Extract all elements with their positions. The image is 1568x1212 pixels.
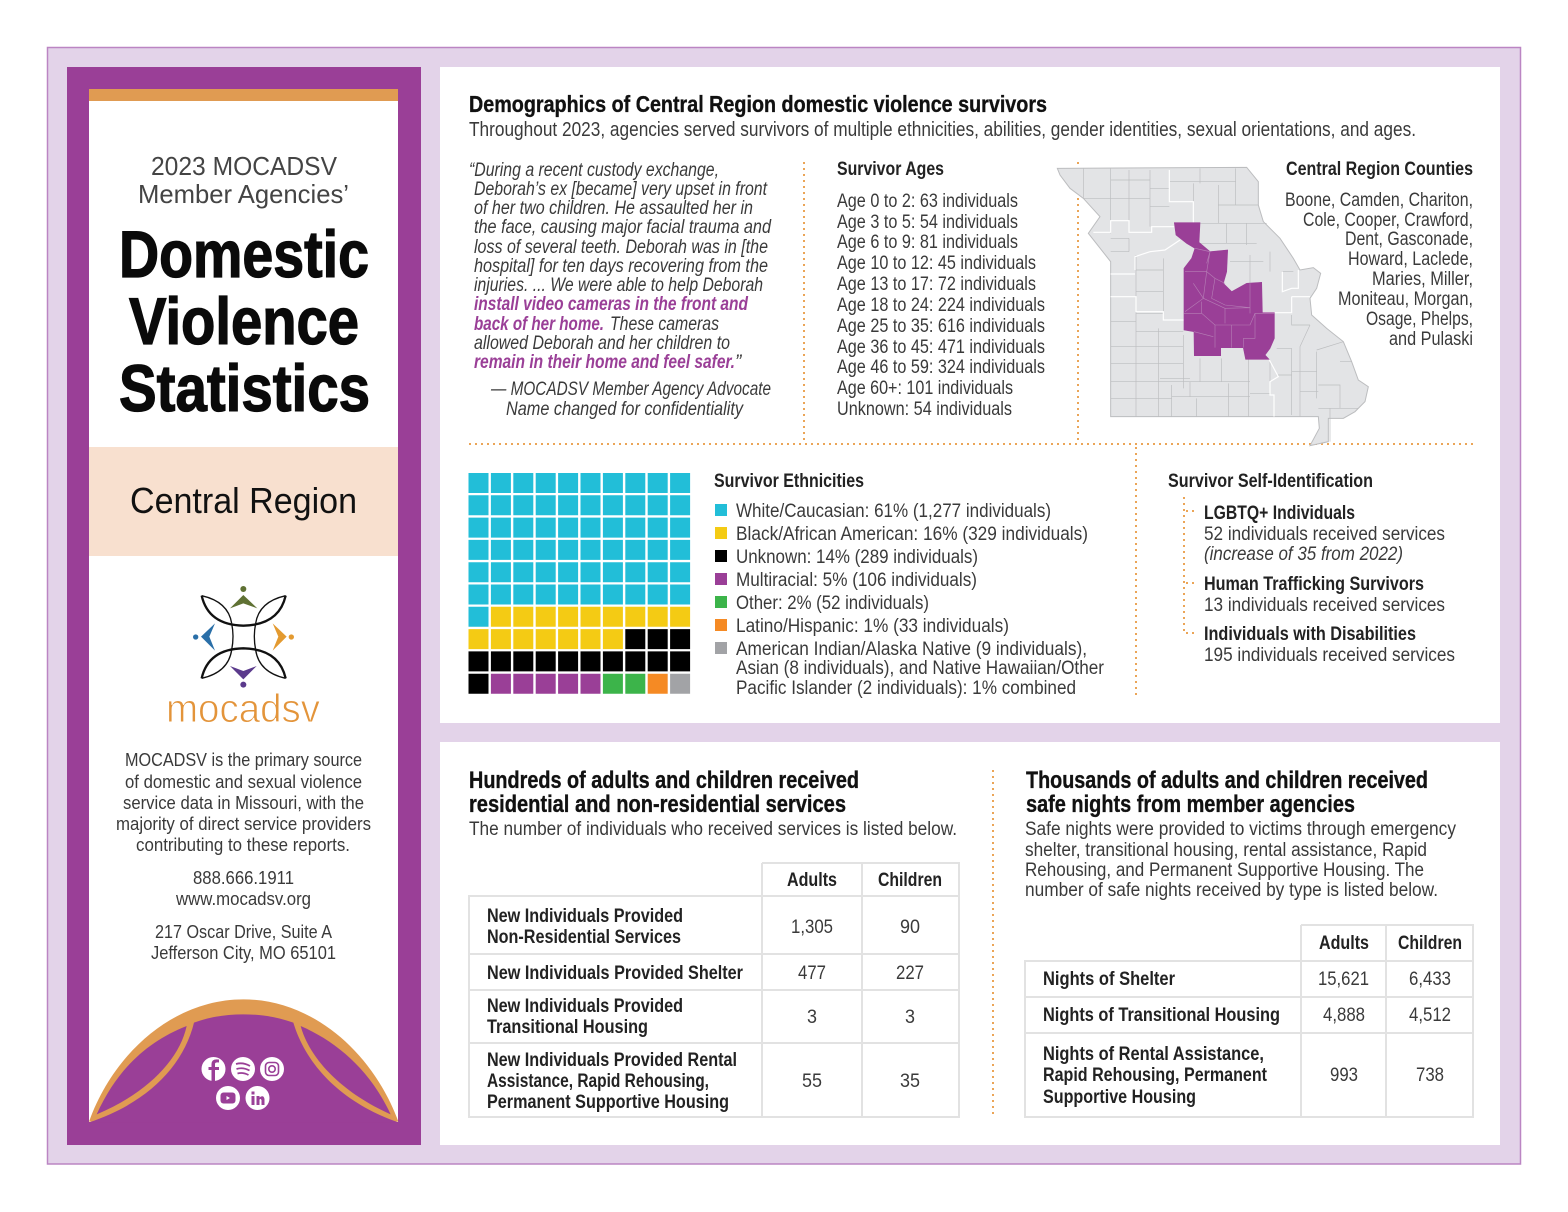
- ethnicity legend: Pacific Islander (2 individuals): 1% combined: [736, 678, 1076, 699]
- survivor self-identification: Survivor Self-Identification: [1168, 471, 1373, 492]
- survivor ages list: Age 25 to 35: 616 individuals: [837, 316, 1045, 337]
- quote from advocate: Name changed for confidentiality: [506, 399, 744, 420]
- heading: demographics: [469, 91, 1416, 141]
- county list: Dent, Gasconade,: [1345, 229, 1473, 250]
- quote from advocate: ”: [735, 352, 743, 373]
- heading: safe nights: number of safe nights received by type is listed below.: [1025, 880, 1438, 901]
- icons: social media: [202, 1057, 284, 1110]
- county list: and Pulaski: [1389, 329, 1473, 350]
- contact details: 217 Oscar Drive, Suite A: [155, 921, 333, 942]
- heading: demographics: Throughout 2023, agencies served survivors of multiple ethnicities, abilities, gender identities, sexual orientations, and ages.: [469, 119, 1416, 141]
- about text: [116, 749, 371, 855]
- map: Missouri counties: [1057, 167, 1368, 446]
- survivor ages list: Age 36 to 45: 471 individuals: [837, 337, 1045, 358]
- ethnicity legend: Black/African American: 16% (329 individuals): [736, 524, 1088, 545]
- table: services: New Individuals Provided: [487, 906, 683, 927]
- heading: safe nights: Thousands of adults and children received: [1026, 767, 1428, 794]
- quote from advocate: loss of several teeth. Deborah was in [the: [474, 237, 768, 258]
- quote from advocate: the face, causing major facial trauma and: [474, 217, 772, 238]
- quote from advocate: back of her home.: [474, 314, 604, 335]
- contact details: www.mocadsv.org: [175, 888, 311, 909]
- heading: demographics: Demographics of Central Region domestic violence survivors: [469, 91, 1047, 117]
- survivor self-identification: (increase of 35 from 2022): [1204, 544, 1403, 565]
- main title: Statistics: [119, 351, 370, 425]
- table: services: Transitional Housing: [487, 1017, 648, 1038]
- ethnicity legend: White/Caucasian: 61% (1,277 individuals): [736, 501, 1051, 522]
- about text: of domestic and sexual violence: [125, 771, 362, 792]
- table: services: 477: [798, 963, 826, 984]
- table: safe nights: Nights of Rental Assistance,: [1043, 1044, 1264, 1065]
- survivor self-identification: 195 individuals received services: [1204, 645, 1455, 666]
- survivor ages list: Age 3 to 5: 54 individuals: [837, 212, 1018, 233]
- survivor self-identification: [1168, 471, 1455, 666]
- panel: services and safe nights: [440, 742, 1500, 1145]
- region band: [89, 447, 398, 556]
- county list: Central Region Counties: [1286, 159, 1473, 180]
- about text: contributing to these reports.: [136, 834, 350, 855]
- table: services: 3: [807, 1007, 817, 1028]
- quote from advocate: “During a recent custody exchange,: [469, 160, 719, 181]
- sidebar subtitle: 2023 MOCADSV: [151, 151, 338, 181]
- table: services: 227: [896, 963, 924, 984]
- heading: services: Hundreds of adults and children received: [469, 767, 859, 794]
- main title: Domestic: [119, 217, 369, 291]
- ethnicity legend: Multiracial: 5% (106 individuals): [736, 570, 977, 591]
- table: services: 1,305: [791, 917, 833, 938]
- table: services: Assistance, Rapid Rehousing,: [487, 1071, 709, 1092]
- icon: mocadsv logo: [166, 586, 320, 731]
- quote from advocate: [469, 160, 772, 420]
- contact details: Jefferson City, MO 65101: [151, 942, 336, 963]
- county list: Osage, Phelps,: [1366, 309, 1473, 330]
- survivor ages list: Age 10 to 12: 45 individuals: [837, 253, 1036, 274]
- table: safe nights: Rapid Rehousing, Permanent: [1043, 1065, 1268, 1086]
- table: safe nights: 4,512: [1409, 1005, 1451, 1026]
- region band: Central Region: [130, 480, 357, 521]
- county list: [1285, 159, 1473, 350]
- table: safe nights: 993: [1330, 1065, 1358, 1086]
- sidebar subtitle: Member Agencies’: [138, 179, 349, 209]
- table: safe nights: 738: [1416, 1065, 1444, 1086]
- table: safe nights: Nights of Shelter: [1043, 969, 1176, 990]
- survivor self-identification: 52 individuals received services: [1204, 524, 1445, 545]
- survivor self-identification: LGBTQ+ Individuals: [1204, 503, 1355, 524]
- ethnicity legend: Other: 2% (52 individuals): [736, 593, 929, 614]
- quote from advocate: allowed Deborah and her children to: [474, 333, 730, 354]
- quote from advocate: Deborah’s ex [became] very upset in front: [474, 179, 768, 200]
- heading: services: The number of individuals who received services is listed below.: [469, 819, 957, 840]
- heading: safe nights: Safe nights were provided to victims through emergency: [1025, 819, 1456, 840]
- ethnicity legend: Latino/Hispanic: 1% (33 individuals): [736, 616, 1009, 637]
- county list: Howard, Laclede,: [1348, 249, 1473, 270]
- contact details: 888.666.1911: [193, 867, 294, 888]
- about text: service data in Missouri, with the: [123, 792, 364, 813]
- county list: Cole, Cooper, Crawford,: [1303, 210, 1473, 231]
- ethnicity legend: Asian (8 individuals), and Native Hawaiian/Other: [736, 658, 1105, 679]
- table: services: New Individuals Provided: [487, 996, 683, 1017]
- table: services: 90: [900, 917, 920, 938]
- icon: mocadsv logo: mocadsv: [166, 687, 320, 731]
- ethnicity legend: Unknown: 14% (289 individuals): [736, 547, 978, 568]
- quote from advocate: of her two children. He assaulted her in: [474, 198, 753, 219]
- decorative dome: [89, 999, 398, 1122]
- table: services: Permanent Supportive Housing: [487, 1092, 729, 1113]
- survivor ages list: Unknown: 54 individuals: [837, 399, 1012, 420]
- table: services: [469, 863, 959, 1117]
- table: services: 3: [905, 1007, 915, 1028]
- ethnicity legend: [714, 471, 1105, 699]
- sidebar subtitle: [138, 151, 349, 209]
- table: safe nights: 4,888: [1323, 1005, 1365, 1026]
- survivor self-identification: Human Trafficking Survivors: [1204, 574, 1424, 595]
- table: safe nights: Nights of Transitional Housing: [1043, 1005, 1280, 1026]
- contact details: [151, 867, 336, 963]
- quote from advocate: — MOCADSV Member Agency Advocate: [490, 379, 771, 400]
- county list: Boone, Camden, Chariton,: [1285, 190, 1473, 211]
- quote from advocate: injuries. ... We were able to help Deborah: [474, 275, 763, 296]
- table: safe nights: [1025, 925, 1473, 1117]
- table: safe nights: Children: [1398, 933, 1462, 954]
- table: services: 35: [900, 1071, 920, 1092]
- survivor ages list: Survivor Ages: [837, 159, 944, 180]
- county list: Maries, Miller,: [1372, 269, 1473, 290]
- heading: services: [469, 767, 957, 840]
- heading: safe nights: Rehousing, and Permanent Supportive Housing. The: [1025, 860, 1424, 881]
- table: services: Children: [878, 870, 942, 891]
- survivor ages list: Age 13 to 17: 72 individuals: [837, 274, 1036, 295]
- survivor ages list: [837, 159, 1045, 420]
- table: safe nights: Supportive Housing: [1043, 1087, 1196, 1108]
- main title: [119, 217, 370, 425]
- survivor ages list: Age 0 to 2: 63 individuals: [837, 191, 1018, 212]
- ethnicity legend: Survivor Ethnicities: [714, 471, 864, 492]
- quote from advocate: These cameras: [610, 314, 719, 335]
- heading: services: residential and non-residential services: [469, 791, 846, 818]
- survivor ages list: Age 6 to 9: 81 individuals: [837, 232, 1018, 253]
- heading: safe nights: shelter, transitional housing, rental assistance, Rapid: [1025, 840, 1427, 861]
- survivor ages list: Age 18 to 24: 224 individuals: [837, 295, 1045, 316]
- survivor ages list: Age 60+: 101 individuals: [837, 378, 1013, 399]
- quote from advocate: hospital] for ten days recovering from the: [474, 256, 768, 277]
- table: safe nights: 15,621: [1318, 969, 1369, 990]
- table: safe nights: Adults: [1319, 933, 1369, 954]
- panel: left sidebar: [67, 67, 421, 1145]
- heading: safe nights: safe nights from member agencies: [1026, 791, 1355, 818]
- about text: majority of direct service providers: [116, 813, 371, 834]
- survivor ages list: Age 46 to 59: 324 individuals: [837, 357, 1045, 378]
- table: services: New Individuals Provided Rental: [487, 1050, 737, 1071]
- survivor self-identification: 13 individuals received services: [1204, 595, 1445, 616]
- chart: ethnicity waffle: [468, 473, 690, 694]
- survivor self-identification: Individuals with Disabilities: [1204, 624, 1416, 645]
- county list: Moniteau, Morgan,: [1338, 289, 1473, 310]
- table: safe nights: 6,433: [1409, 969, 1451, 990]
- quote from advocate: install video cameras in the front and: [474, 294, 748, 315]
- table: services: Adults: [787, 870, 837, 891]
- panel: demographics: [440, 67, 1500, 723]
- ethnicity legend: American Indian/Alaska Native (9 individuals),: [736, 639, 1087, 660]
- about text: MOCADSV is the primary source: [125, 749, 362, 770]
- table: services: 55: [802, 1071, 822, 1092]
- main title: Violence: [129, 284, 359, 358]
- table: services: Non-Residential Services: [487, 927, 681, 948]
- table: services: New Individuals Provided Shelter: [487, 963, 744, 984]
- heading: safe nights: [1025, 767, 1456, 901]
- quote from advocate: remain in their home and feel safer.: [474, 352, 735, 373]
